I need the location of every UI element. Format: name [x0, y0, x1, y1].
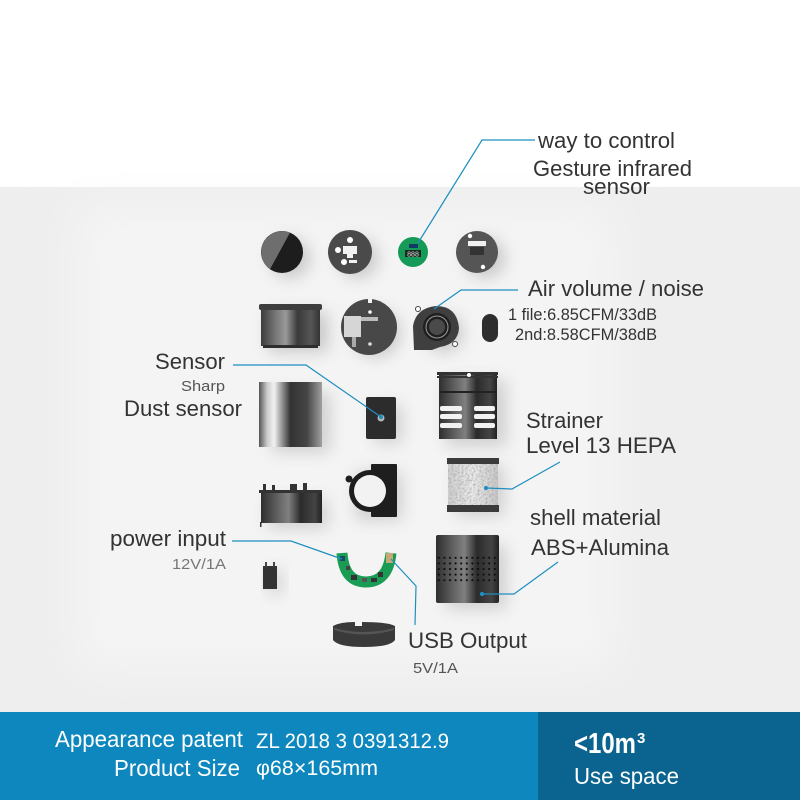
- callout: strainer: Level 13 HEPA: [526, 433, 676, 458]
- text: use space value: 3: [637, 730, 645, 747]
- icon: dark pill: [482, 314, 498, 342]
- text: patent and size: φ68×165mm: [256, 757, 378, 780]
- callout: strainer: Strainer: [526, 408, 603, 433]
- panel: use space: [538, 712, 800, 800]
- callout: power input: power input: [110, 526, 226, 551]
- parts column left: sleeve, base and plug: [259, 382, 330, 594]
- icon: green gesture sensor board: 888: [407, 252, 419, 258]
- callout: sensor: Sensor: [155, 349, 225, 374]
- text: use space value: [574, 728, 679, 789]
- callout: USB output: USB Output: [408, 628, 527, 653]
- icon: slotted filter cage: [437, 372, 498, 439]
- text: patent and size: Appearance patent: [55, 726, 244, 752]
- icon: lower cylinder with pegs: [259, 483, 322, 527]
- icon: tall metal sleeve: [259, 382, 322, 447]
- callout: USB output: [408, 628, 527, 677]
- icon: glossy black disc: [261, 231, 303, 273]
- icon: disc with cut-outs: [328, 230, 372, 274]
- icon: round plate: [341, 299, 397, 355]
- icon: short cylinder cap: [259, 304, 322, 348]
- icon: dust sensor box: [366, 397, 396, 439]
- icon: base ring: [333, 622, 395, 647]
- callout: way to control: sensor: [583, 174, 650, 199]
- callout: shell material: [530, 505, 670, 560]
- callout: way to control: way to control: [537, 128, 675, 153]
- callout: shell material: shell material: [530, 505, 661, 530]
- callout: strainer: [526, 408, 676, 458]
- icon: green gesture sensor board: [398, 237, 428, 267]
- icon: curved green power board: [340, 553, 393, 582]
- icon: small plug: [263, 562, 277, 589]
- text: use space value: <10m: [574, 728, 636, 760]
- parts row 1: discs and circuit board: [261, 230, 505, 278]
- callout: air volume and noise: 2nd:8.58CFM/38dB: [515, 325, 657, 344]
- parts column right: cage, filter and shell: [333, 372, 506, 647]
- callout: sensor: Dust sensor: [124, 396, 242, 421]
- callout: air volume and noise: [508, 276, 704, 344]
- icon: blower fan: [413, 306, 459, 350]
- text: patent and size: [55, 726, 449, 781]
- callout: way to control: [533, 128, 692, 199]
- icon: rear disc with slot: [456, 231, 498, 273]
- text: patent and size: ZL 2018 3 0391312.9: [256, 730, 449, 753]
- callout: shell material: ABS+Alumina: [531, 535, 670, 560]
- icon: black bracket: [346, 464, 397, 517]
- parts centre: sensor box, bracket and circuit board: [340, 397, 402, 582]
- callout: power input: [110, 526, 226, 573]
- leader lines: [232, 140, 560, 625]
- icon: perforated outer shell: [436, 535, 499, 603]
- text: patent and size: Product Size: [114, 755, 240, 781]
- callout: USB output: 5V/1A: [413, 660, 458, 677]
- parts row 2: cap, plate, fan and pill: [259, 299, 498, 357]
- callout: way to control: Gesture infrared: [533, 156, 692, 181]
- panel: bottom specification bar: [0, 712, 538, 800]
- icon: HEPA filter: [447, 458, 499, 512]
- callout: air volume and noise: 1 file:6.85CFM/33dB: [508, 305, 657, 324]
- callout: air volume and noise: Air volume / noise: [528, 276, 704, 301]
- callout: sensor: [124, 349, 242, 421]
- callout: sensor: Sharp: [181, 378, 225, 395]
- text: use space value: Use space: [574, 763, 679, 789]
- callout: power input: 12V/1A: [172, 556, 226, 573]
